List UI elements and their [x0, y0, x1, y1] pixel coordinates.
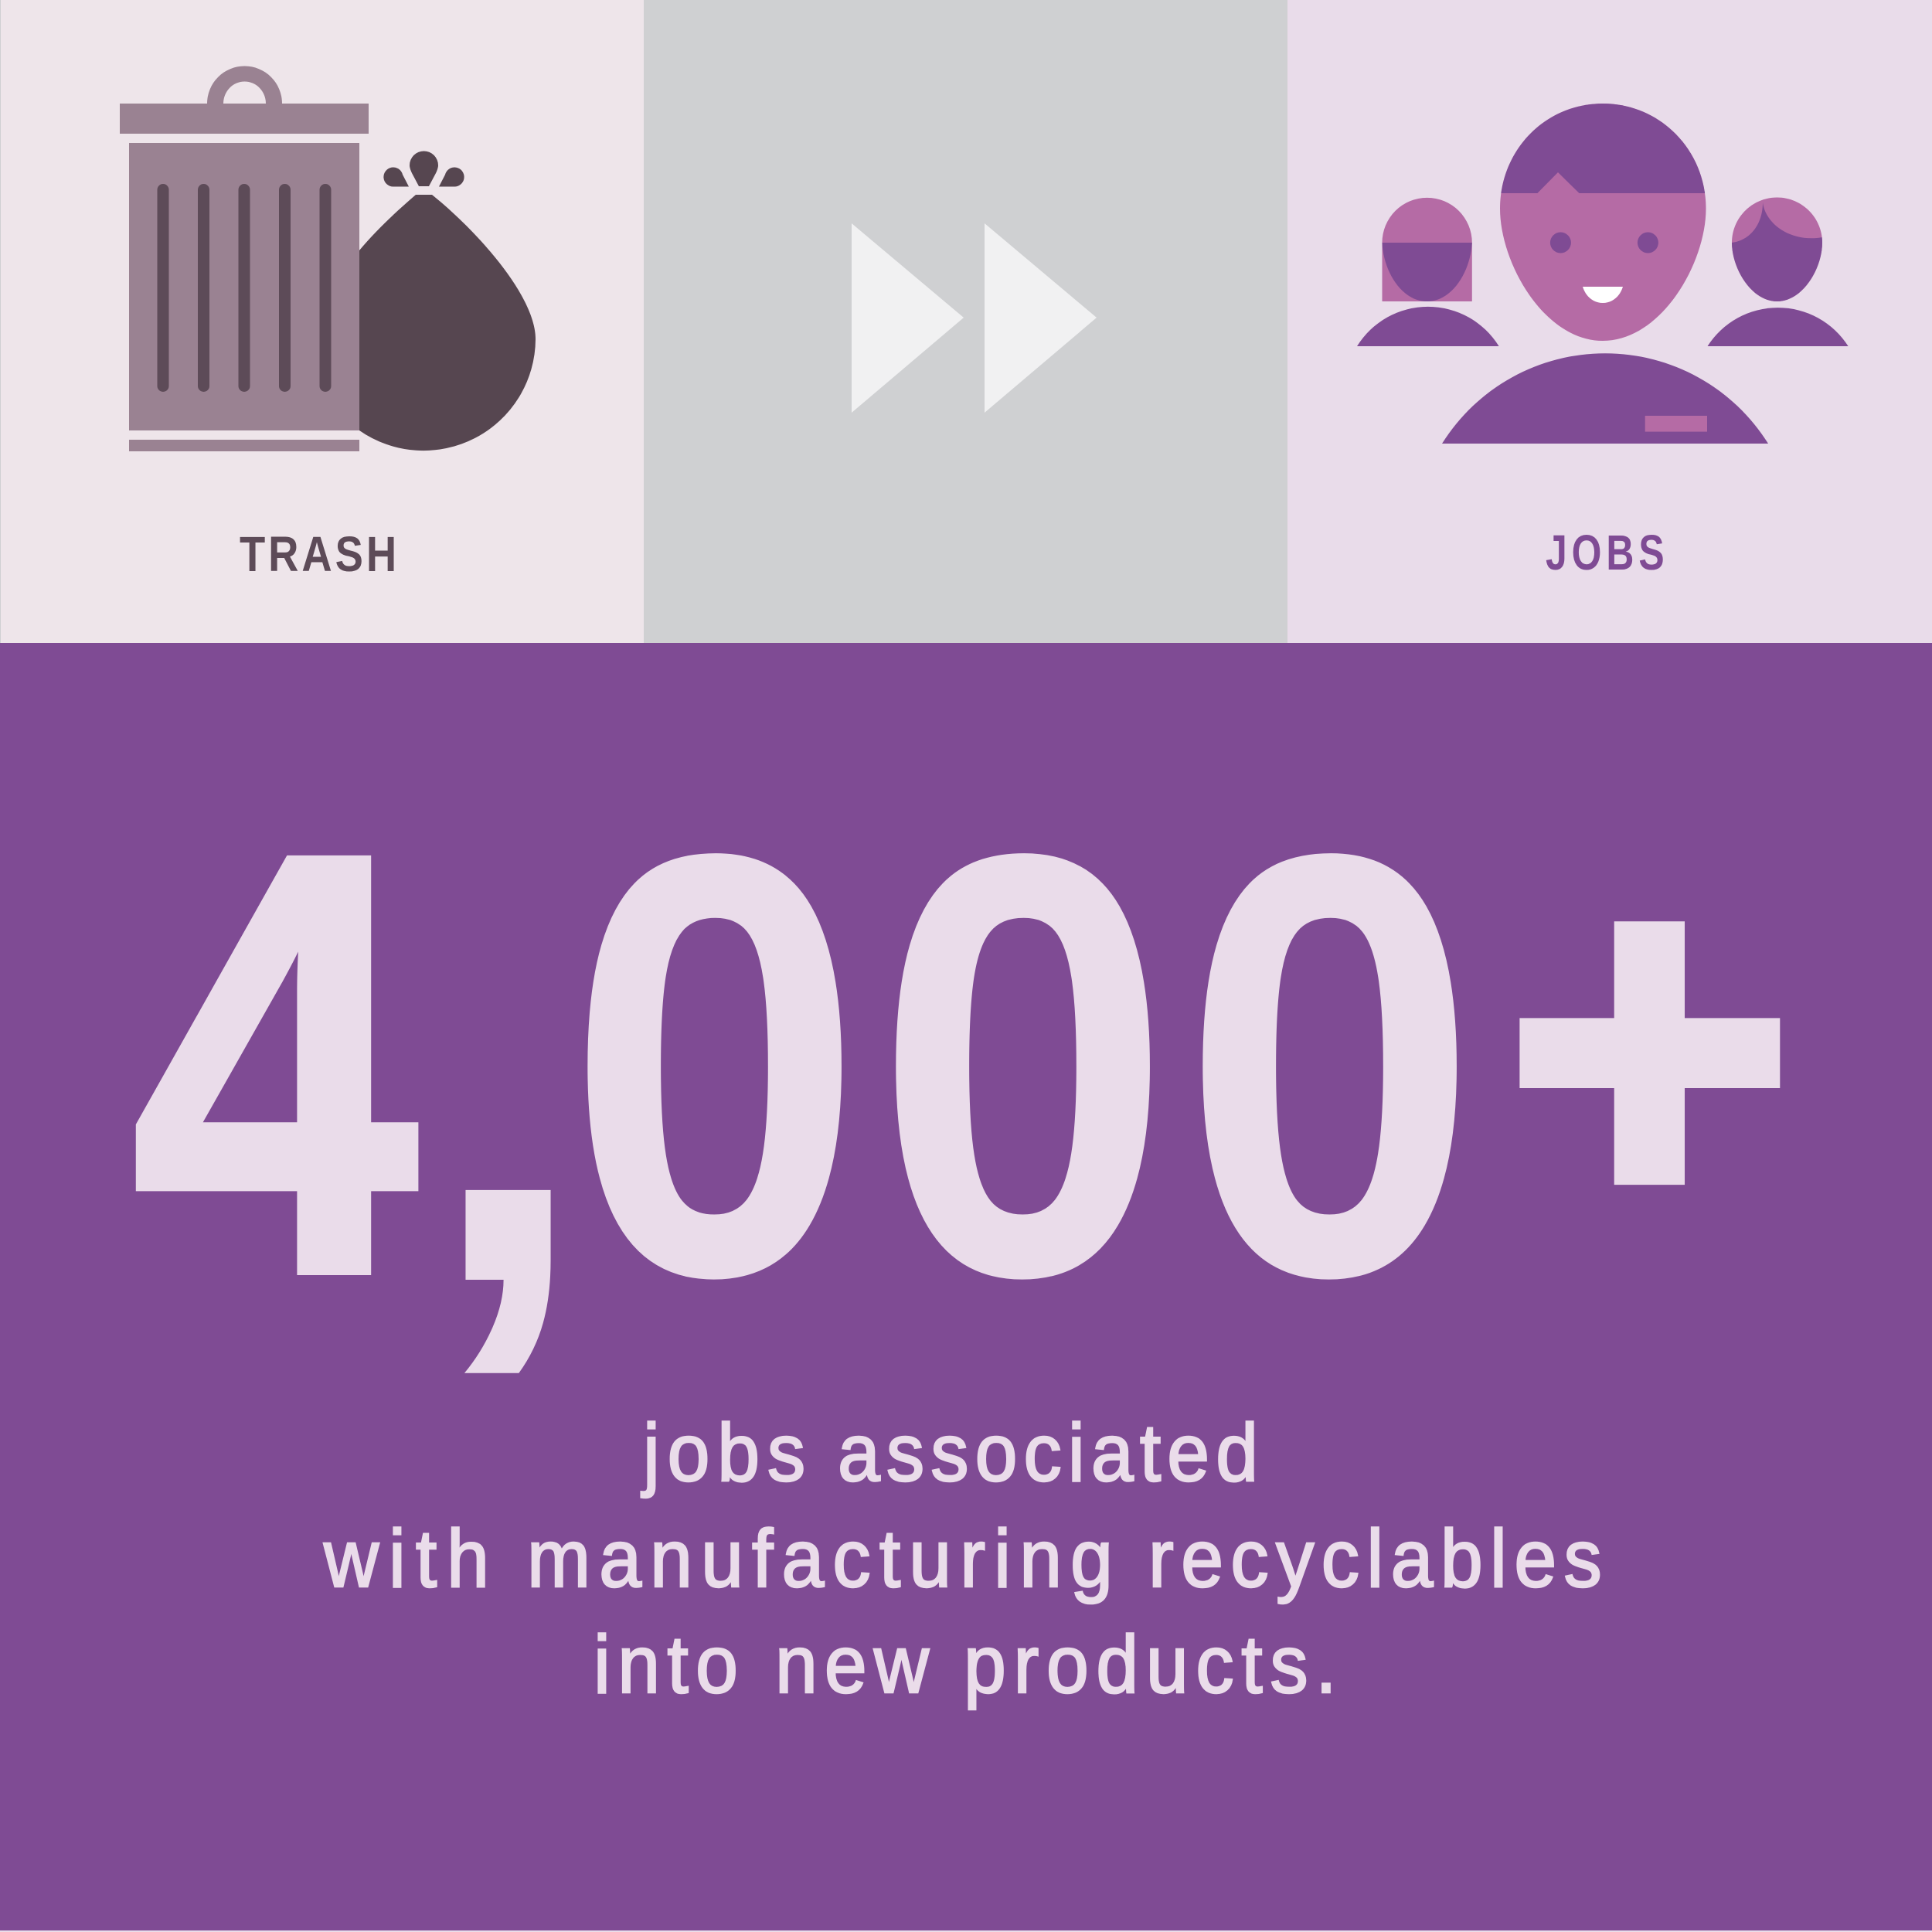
label: jobs: JOBS	[1546, 526, 1665, 580]
description text: into	[594, 1618, 738, 1710]
description text: jobs	[641, 1406, 805, 1498]
big number	[131, 729, 1791, 1408]
description text: recyclables	[1148, 1512, 1602, 1604]
icon: worker right	[1708, 198, 1849, 346]
icon: worker left	[1357, 198, 1499, 346]
icon: trash can	[120, 66, 369, 451]
panel: statistic	[0, 643, 1932, 1932]
description text: associated	[838, 1406, 1258, 1498]
description text: manufacturing	[527, 1512, 1113, 1604]
panel: arrow divider	[644, 0, 1287, 643]
panel: trash	[0, 0, 644, 643]
panel: jobs	[1357, 104, 1849, 570]
icon: garbage bag	[359, 151, 536, 451]
label: trash: TRASH	[240, 526, 396, 582]
description text: with	[323, 1512, 489, 1604]
description text: new	[775, 1618, 930, 1710]
big number: 0	[566, 729, 863, 1402]
big number: 0	[1182, 729, 1478, 1402]
big number: ,	[423, 735, 591, 1408]
big number: 0	[875, 729, 1172, 1402]
big number: +	[1508, 776, 1791, 1318]
icon: fast-forward arrows	[852, 223, 1097, 413]
icon: worker centre	[1442, 93, 1768, 444]
description text: products.	[964, 1618, 1337, 1710]
big number: 4	[131, 730, 421, 1399]
description text	[323, 1406, 1602, 1710]
